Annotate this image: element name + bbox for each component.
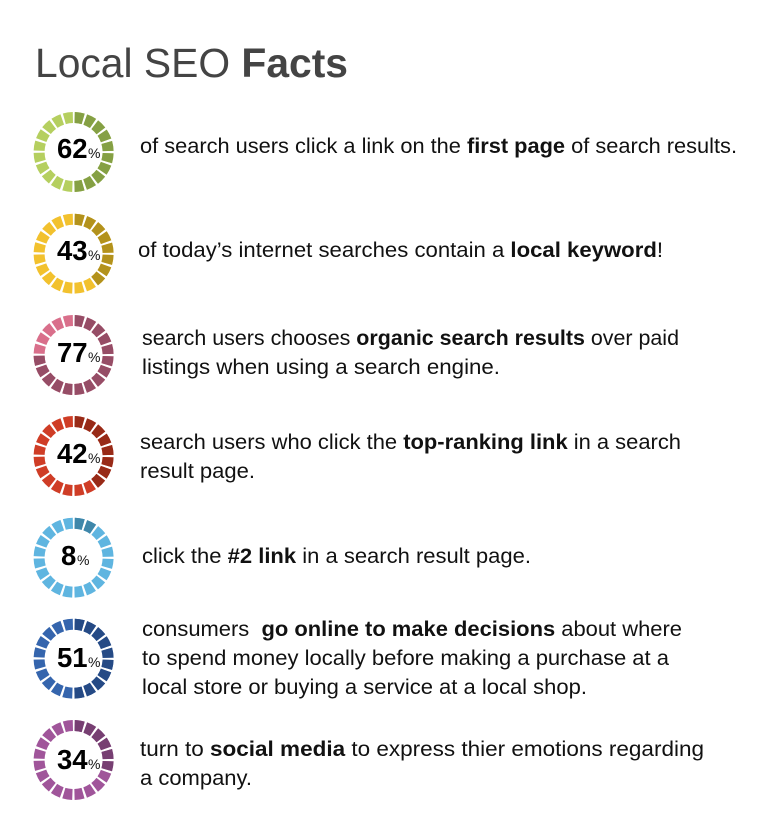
text: 77% fact: listings when using a search engine. — [142, 356, 500, 379]
ring: 62% — [39, 118, 108, 186]
text: 43% fact: of today’s internet searches contain a local keyword ! — [138, 239, 663, 262]
text: 34% fact: a company. — [140, 767, 252, 790]
ring: 34% — [39, 726, 108, 794]
text: 77% fact: search users chooses organic search results over paid — [142, 327, 679, 350]
fact row: 62% — [39, 118, 737, 186]
number: 8%: % — [77, 552, 89, 568]
text: 51% fact: to spend money locally before making a purchase at a — [142, 647, 669, 670]
text: 8% fact: click the #2 link in a search result page. — [142, 545, 531, 568]
number: 42%: 42 — [57, 438, 88, 469]
fact row: 77% — [39, 320, 679, 390]
number: 51%: % — [88, 654, 100, 670]
number: 77%: % — [88, 349, 100, 365]
text: 42% fact: result page. — [140, 460, 255, 483]
number: 8%: 8 — [61, 540, 76, 571]
number: 42%: % — [88, 450, 100, 466]
text: 51% fact — [142, 618, 682, 699]
number: 51%: 51 — [57, 642, 88, 673]
text: 51% fact: consumers go online to make decisions about where — [142, 618, 682, 641]
number: 34%: % — [88, 756, 100, 772]
number: 62%: % — [88, 145, 100, 161]
text: 51% fact: local store or buying a service at a local shop. — [142, 676, 587, 699]
number: 77%: 77 — [57, 337, 88, 368]
text: 62% fact: of search users click a link on the first page of search results. — [140, 135, 737, 158]
fact row: 43% — [39, 219, 663, 288]
text: 77% fact — [142, 327, 679, 379]
fact row: 51% — [39, 618, 682, 699]
fact row: 42% — [39, 422, 681, 490]
fact row: 34% — [39, 726, 704, 794]
number: 43%: 43 — [57, 235, 88, 266]
text: 34% fact — [140, 738, 704, 790]
ring: 43% — [39, 219, 108, 288]
fact row: 8% — [39, 523, 531, 592]
number: 62%: 62 — [57, 133, 88, 164]
ring: 51% — [39, 624, 108, 693]
title: Local SEO Facts — [35, 40, 348, 86]
ring: 8% — [39, 523, 108, 592]
ring: 42% — [39, 422, 108, 490]
number: 43%: % — [88, 247, 100, 263]
text: 42% fact — [140, 431, 681, 483]
number: 34%: 34 — [57, 744, 88, 775]
ring: 77% — [39, 320, 108, 390]
text: 42% fact: search users who click the top-ranking link in a search — [140, 431, 681, 454]
text: 34% fact: turn to social media to express thier emotions regarding — [140, 738, 704, 761]
